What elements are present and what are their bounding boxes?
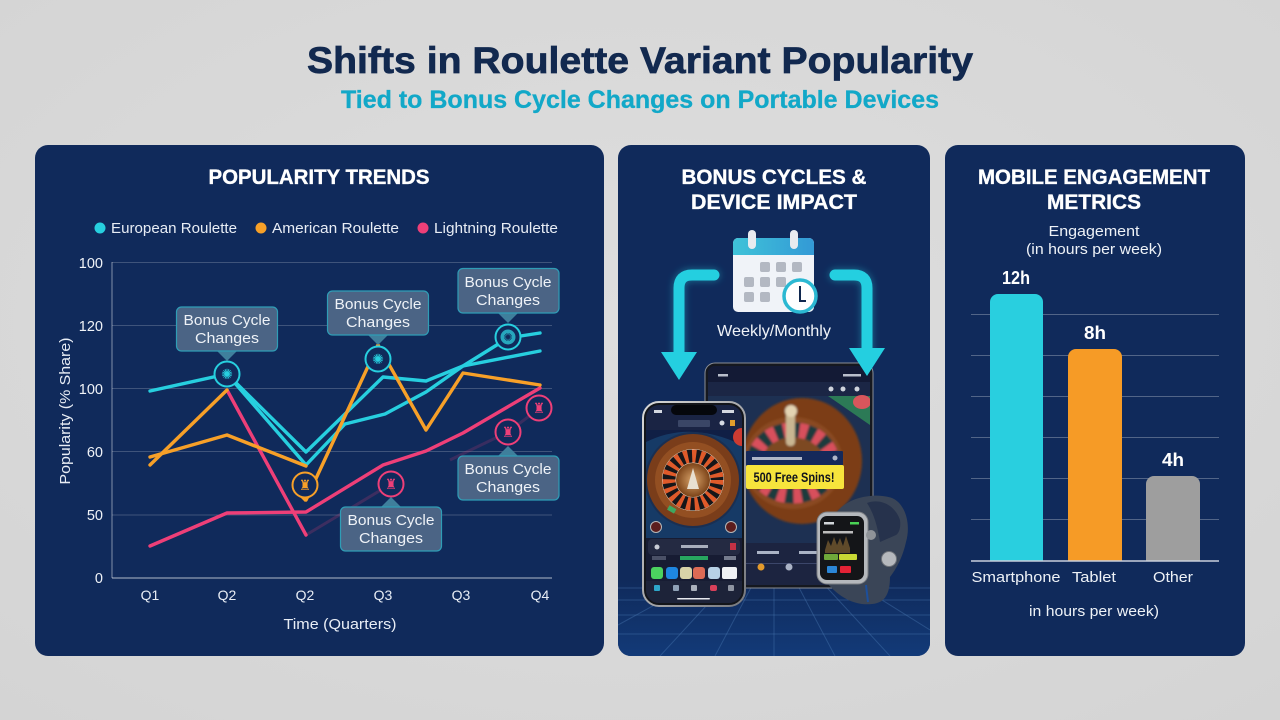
marker: cyan Q2 xyxy=(214,362,240,386)
marker: orange xyxy=(292,472,318,502)
callout: bonus cycle changes right lower xyxy=(458,446,559,500)
smartwatch device xyxy=(817,496,908,604)
y axis labels: 50 xyxy=(87,508,103,524)
floor grid xyxy=(618,580,930,656)
marker: orange: ♜ xyxy=(299,477,311,493)
bar: smartphone 12h xyxy=(990,268,1043,561)
line chart xyxy=(57,256,559,633)
legend: Lightning Roulette xyxy=(434,221,558,237)
callout: bonus cycle changes Q3 xyxy=(328,291,428,345)
heading: mobile engagement metrics xyxy=(978,166,1210,214)
icon: calendar with clock xyxy=(733,230,816,312)
heading: bonus cycles: BONUS CYCLES & xyxy=(682,166,866,189)
heading: mobile engagement metrics: MOBILE ENGAGEMENT xyxy=(978,166,1210,189)
heading: popularity trends: POPULARITY TRENDS xyxy=(208,166,430,189)
legend: European Roulette xyxy=(111,221,237,237)
marker: cyan Q4 xyxy=(496,324,520,350)
marker: cyan Q2: ✺ xyxy=(221,366,233,382)
x axis title: Time (Quarters) xyxy=(284,616,396,633)
x axis labels: Q1 xyxy=(141,587,160,603)
category labels: Smartphone xyxy=(972,569,1060,586)
callout: bonus cycle changes Q4 xyxy=(458,268,559,323)
unit note: in hours per week) xyxy=(1029,603,1159,620)
callout: bonus cycle changes right lower: Changes xyxy=(476,480,540,496)
faint pink trail right xyxy=(450,408,540,460)
heading: bonus cycles xyxy=(682,166,866,214)
chart subtitle xyxy=(1026,223,1162,258)
legend: American Roulette xyxy=(272,221,399,237)
y axis labels: 120 xyxy=(79,319,103,335)
marker: pink right xyxy=(526,396,552,420)
callout: bonus cycle changes lower xyxy=(340,497,442,551)
callout: bonus cycle changes Q3: Changes xyxy=(346,315,410,331)
marker: cyan Q3 xyxy=(366,346,390,372)
chart subtitle: (in hours per week) xyxy=(1026,241,1162,258)
smartphone device xyxy=(643,402,751,606)
marker: cyan Q3: ✺ xyxy=(372,351,384,367)
bar: tablet 8h: 8h xyxy=(1084,323,1106,343)
category labels xyxy=(972,569,1193,586)
x axis labels: Q4 xyxy=(531,587,550,603)
marker: pink middle xyxy=(496,420,520,444)
series: lightning roulette xyxy=(150,388,540,546)
y axis labels: 0 xyxy=(95,571,103,587)
callout: bonus cycle changes Q2: Changes xyxy=(195,331,259,347)
marker: pink lower: ♜ xyxy=(385,476,397,492)
y axis labels xyxy=(79,256,103,587)
callout: bonus cycle changes Q3: Bonus Cycle xyxy=(334,297,422,313)
marker: pink lower xyxy=(378,472,404,496)
callout: bonus cycle changes Q2: Bonus Cycle xyxy=(184,313,270,329)
title: Shifts in Roulette Variant Popularity xyxy=(307,40,973,81)
series: american roulette xyxy=(150,345,540,500)
faint pink trail xyxy=(306,484,391,535)
bonus popup: 500 free spins: 500 Free Spins! xyxy=(754,469,834,485)
bar: smartphone 12h: 12h xyxy=(1002,268,1030,288)
panel: bonus cycles and device impact xyxy=(618,145,930,656)
bar chart xyxy=(971,268,1219,586)
callout: bonus cycle changes lower: Changes xyxy=(359,531,423,547)
x axis labels: Q3 xyxy=(452,587,471,603)
chart subtitle: Engagement xyxy=(1048,223,1140,240)
tablet device xyxy=(705,363,873,588)
callout: bonus cycle changes right lower: Bonus Cycle xyxy=(464,462,552,478)
bonus popup: 500 free spins xyxy=(746,451,844,489)
bar: other 4h: 4h xyxy=(1162,450,1184,470)
marker: pink right: ♜ xyxy=(533,400,545,416)
bar: other 4h xyxy=(1146,450,1200,561)
arrow: right xyxy=(835,275,885,376)
y axis labels: 60 xyxy=(87,445,103,461)
bar: tablet 8h xyxy=(1068,323,1122,561)
marker: pink middle: ♜ xyxy=(502,424,514,440)
label: weekly/monthly: Weekly/Monthly xyxy=(717,323,831,340)
callout: bonus cycle changes lower: Bonus Cycle xyxy=(348,513,434,529)
callout: bonus cycle changes Q4: Changes xyxy=(476,293,540,309)
x axis labels: Q2 xyxy=(218,587,237,603)
subtitle: Tied to Bonus Cycle Changes on Portable Devices xyxy=(341,86,939,114)
heading: bonus cycles: DEVICE IMPACT xyxy=(691,191,857,214)
callout: bonus cycle changes Q2 xyxy=(176,307,278,361)
y axis title: Popularity (% Share) xyxy=(57,338,74,484)
category labels: Tablet xyxy=(1072,569,1117,586)
arrow: left xyxy=(661,275,714,380)
panel: popularity trends xyxy=(35,145,604,656)
category labels: Other xyxy=(1153,569,1193,586)
y axis labels: 100 xyxy=(79,256,103,272)
y axis labels: 100 xyxy=(79,382,103,398)
series: european roulette xyxy=(150,333,540,465)
marker: cyan Q4: ✺ xyxy=(503,332,513,344)
panel: mobile engagement metrics xyxy=(945,145,1245,656)
x axis labels: Q3 xyxy=(374,587,393,603)
callout: bonus cycle changes Q4: Bonus Cycle xyxy=(464,275,552,291)
x axis labels xyxy=(141,587,550,603)
legend xyxy=(94,221,558,237)
x axis labels: Q2 xyxy=(296,587,315,603)
heading: mobile engagement metrics: METRICS xyxy=(1047,191,1141,214)
